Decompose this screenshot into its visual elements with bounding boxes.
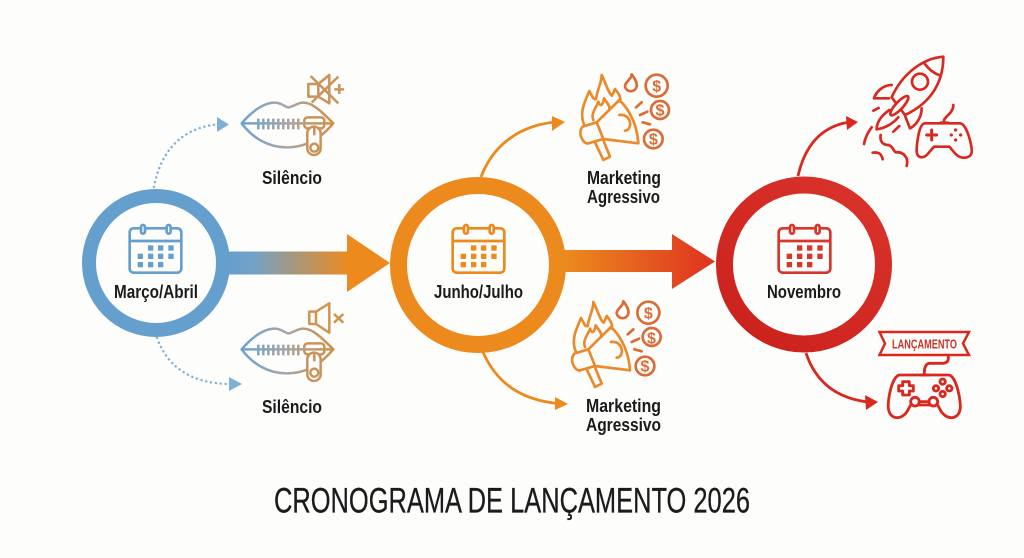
icon: rocket	[864, 57, 943, 166]
icon: dollar signs top	[649, 78, 665, 148]
label: Silêncio bottom: Silêncio	[262, 397, 322, 417]
icon: calendar red	[779, 225, 830, 273]
icon: dollar signs top: $	[652, 78, 661, 96]
ring: Novembro	[724, 185, 884, 344]
icon: launch banner: LANÇAMENTO	[892, 338, 957, 352]
arrow: March to June	[228, 234, 390, 292]
label: Março/Abril: Março/Abril	[114, 282, 198, 302]
label: Marketing Agressivo top	[587, 168, 661, 207]
label: Silêncio top: Silêncio	[262, 168, 322, 188]
arrow: June to November	[562, 234, 715, 289]
label: Marketing Agressivo bottom: Marketing	[586, 396, 661, 416]
icon: flaming megaphone top	[580, 74, 669, 160]
title: CRONOGRAMA DE LANÇAMENTO 2026	[274, 482, 750, 520]
label: Junho/Julho: Junho/Julho	[434, 282, 523, 302]
arrow: dotted to bottom Silêncio	[157, 338, 242, 391]
icon: dollar signs bottom: $	[647, 330, 656, 348]
icon: flaming megaphone bottom	[572, 301, 661, 387]
icon: muted speaker top	[308, 75, 344, 103]
label: Marketing Agressivo bottom: Agressivo	[586, 415, 661, 435]
label: Marketing Agressivo top: Marketing	[587, 168, 661, 188]
icon: dollar signs bottom: $	[644, 306, 653, 322]
icon: game controller top	[917, 105, 972, 158]
icon: game controller bottom	[888, 355, 960, 418]
ring: Junho/Julho	[398, 186, 558, 344]
arrow: to top Marketing	[481, 116, 565, 177]
icon: muted speaker bottom	[309, 303, 343, 333]
icon: zipped lips bottom	[242, 329, 333, 381]
label: Marketing Agressivo top: Agressivo	[587, 187, 660, 207]
ring: Março/Abril	[89, 196, 223, 330]
icon: zipped lips top	[242, 103, 333, 155]
icon: calendar blue	[130, 225, 181, 273]
icon: dollar signs bottom: $	[641, 358, 650, 376]
icon: launch banner	[880, 332, 969, 355]
icon: dollar signs bottom	[641, 306, 656, 376]
icon: dollar signs top: $	[656, 102, 665, 120]
icon: calendar orange	[453, 225, 504, 273]
label: Novembro: Novembro	[767, 282, 841, 302]
label: Marketing Agressivo bottom	[586, 396, 661, 435]
arrow: to launch controller	[806, 353, 878, 410]
arrow: dotted to top Silêncio	[154, 117, 229, 187]
icon: dollar signs top: $	[649, 132, 658, 148]
arrow: to bottom Marketing	[483, 352, 568, 410]
arrow: to rocket	[798, 116, 858, 176]
